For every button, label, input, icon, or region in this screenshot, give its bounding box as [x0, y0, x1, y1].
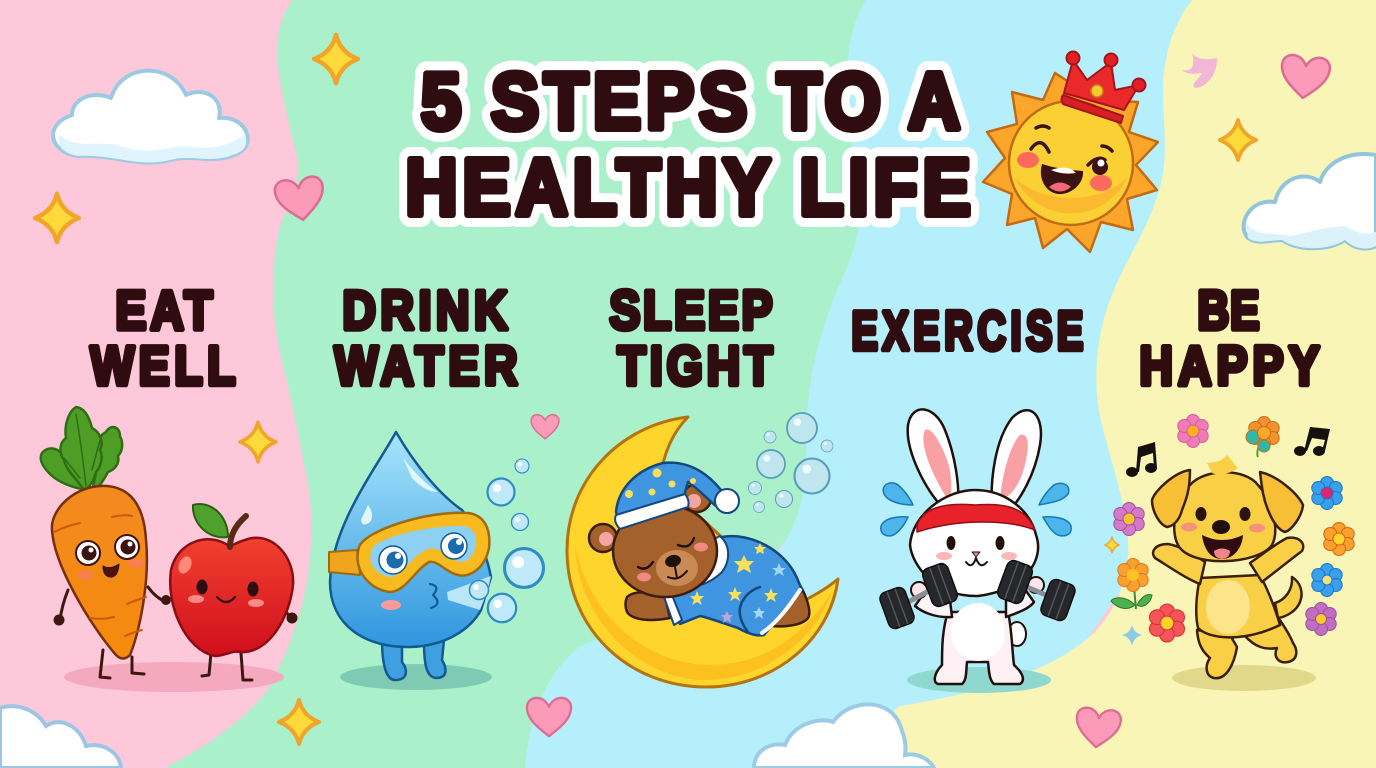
nightcap band	[615, 494, 689, 529]
label: sleep tight: SLEEP	[610, 279, 772, 341]
headband	[917, 504, 1035, 532]
sweat drops	[881, 483, 1071, 536]
bear foot	[768, 578, 809, 626]
title: 5 STEPS TO A	[421, 57, 960, 146]
shadow: dog	[1172, 665, 1316, 691]
crown	[1062, 52, 1146, 123]
goggles lens	[370, 526, 476, 577]
label: sleep tight: TIGHT	[618, 335, 772, 396]
sparkle: by apple	[240, 422, 276, 462]
shadow: water drop	[340, 664, 492, 690]
label: be happy	[1140, 279, 1320, 396]
label: eat well: WELL	[90, 335, 235, 396]
carrot limbs	[60, 587, 166, 678]
bear head	[613, 505, 717, 597]
dog tuft	[1207, 455, 1238, 474]
label: sleep tight	[610, 279, 772, 396]
dog head	[1174, 472, 1275, 561]
icon: pink bird	[1182, 53, 1217, 88]
title: HEALTHY LIFE	[406, 143, 971, 232]
cloud: bottom left	[0, 706, 121, 768]
sparkle: by dog blue	[1122, 625, 1142, 646]
rabbit hands	[911, 577, 1044, 598]
cloud: top left	[53, 71, 248, 162]
heart: top right	[1279, 54, 1331, 100]
label: be happy: BE	[1198, 279, 1260, 341]
heart: pink band	[273, 175, 327, 223]
pajama leg line and cuff	[740, 587, 760, 632]
sparkle: left	[35, 194, 79, 242]
pajama pale stars	[721, 563, 786, 623]
flowers around the dog	[1111, 414, 1354, 642]
title: HEALTHY LIFE	[406, 143, 971, 232]
dog legs	[1197, 630, 1237, 678]
rabbit head	[910, 490, 1038, 596]
label: drink water	[334, 279, 518, 396]
label: be happy: HAPPY	[1140, 335, 1320, 396]
dog arms	[1153, 544, 1205, 584]
character: dancing dog	[1152, 455, 1303, 678]
title	[406, 57, 971, 232]
rabbit tail	[1008, 622, 1026, 646]
icon: sun with crown	[983, 52, 1158, 252]
carrot body	[52, 486, 147, 658]
character: carrot	[41, 407, 166, 678]
nightcap	[616, 463, 724, 518]
dog ears	[1152, 470, 1303, 532]
drop eyes	[379, 546, 407, 574]
heart: by drop	[531, 415, 559, 439]
sun mouth	[1041, 164, 1083, 194]
label: exercise: EXERCISE	[852, 301, 1083, 362]
rabbit arms	[915, 588, 1034, 617]
background: blue band	[525, 0, 1250, 768]
carrot face	[77, 558, 144, 580]
bear pajama body	[668, 536, 802, 635]
sparkle: top right	[1220, 120, 1256, 160]
background: yellow band	[883, 0, 1376, 768]
sparkle: bottom left	[279, 700, 319, 744]
carrot leaves	[41, 407, 122, 492]
character: water drop with goggles	[329, 432, 491, 680]
shadow: carrot and apple	[64, 662, 284, 692]
icon: music note right	[1294, 427, 1330, 456]
bubbles: water drop	[470, 459, 544, 622]
icon: music note left	[1126, 442, 1157, 477]
sparkle: by dog yellow	[1105, 537, 1119, 553]
bear ears	[589, 524, 617, 552]
goggles frame	[357, 513, 489, 592]
label: drink water: DRINK	[342, 279, 508, 341]
sparkle: top	[314, 35, 358, 83]
bear paw	[626, 592, 670, 620]
label: eat well	[90, 279, 235, 396]
drop mouth and cheek	[430, 584, 438, 608]
character: bear on the moon	[567, 417, 838, 687]
pajama stars	[690, 543, 778, 605]
heart: bottom middle	[527, 698, 571, 736]
rabbit face	[946, 536, 956, 550]
dumbbells	[897, 582, 1058, 608]
label: eat well: EAT	[116, 279, 213, 341]
crescent moon	[567, 417, 838, 687]
shadow: rabbit	[907, 667, 1051, 693]
cloud: top right	[1244, 154, 1376, 248]
background: green band	[165, 0, 900, 768]
dog tail	[1275, 577, 1302, 618]
bear collar	[684, 536, 728, 588]
title: 5 STEPS TO A	[421, 57, 960, 146]
sun eyes	[1031, 126, 1112, 165]
air puff	[447, 576, 491, 610]
dog body	[1196, 575, 1280, 637]
goggles strap	[329, 550, 360, 575]
rabbit ears	[908, 409, 1041, 512]
pajama sleeve cuff	[664, 595, 682, 625]
cloud: bottom centre	[754, 704, 934, 768]
rabbit body	[935, 612, 1023, 684]
sun cheeks	[1017, 152, 1112, 191]
character: apple	[161, 504, 298, 680]
bubbles: sleep	[748, 413, 833, 512]
dog face	[1196, 507, 1206, 521]
character: rabbit lifting dumbbells	[878, 409, 1077, 684]
label: drink water: WATER	[334, 335, 518, 396]
heart: bottom right	[1074, 707, 1122, 749]
